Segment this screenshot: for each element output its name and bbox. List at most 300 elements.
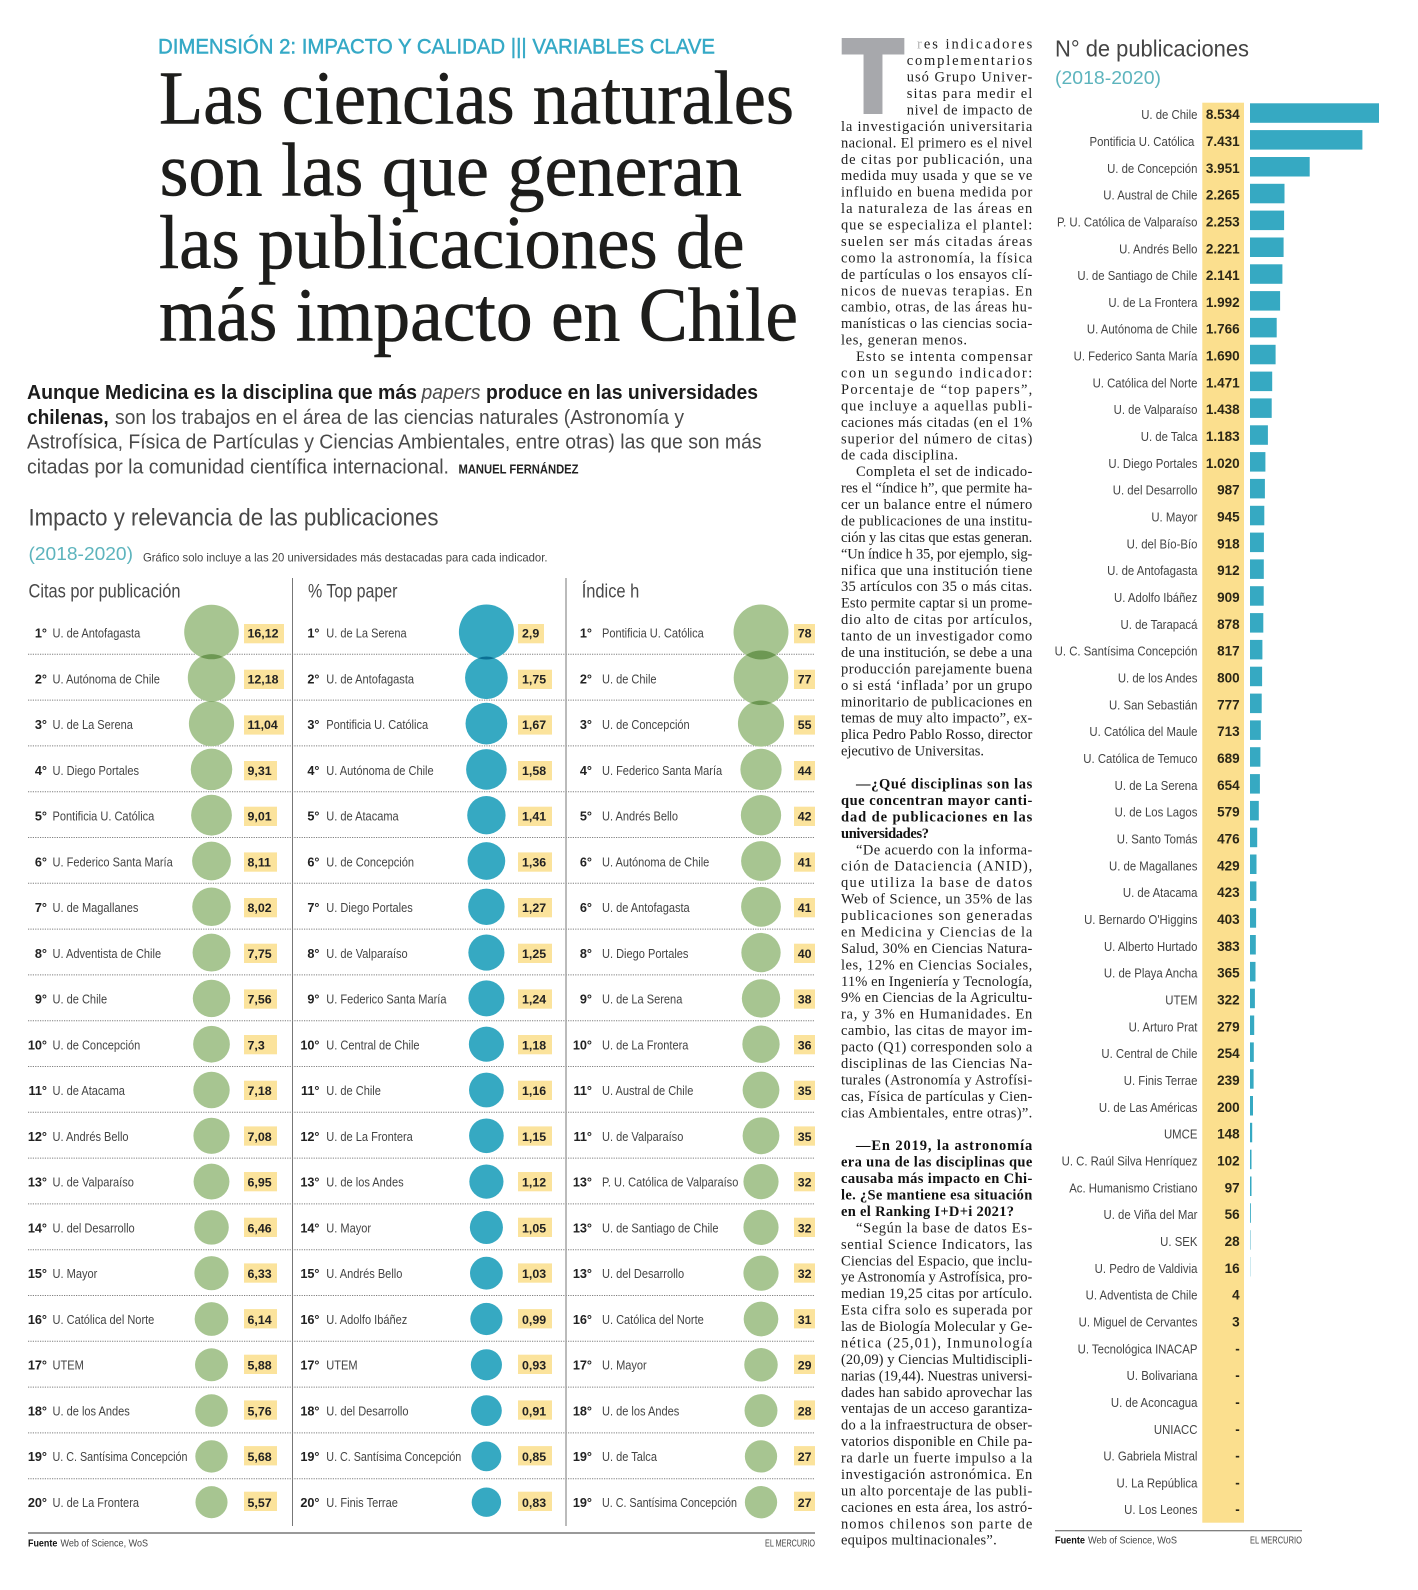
values: publicaciones: 1.766 — [1206, 322, 1240, 337]
university names: publicaciones: U. Bolivariana — [1127, 1368, 1198, 1383]
article text: tanto de un investigador como — [841, 628, 1032, 644]
ranks: citas — [28, 627, 47, 1510]
values: índice h: 32 — [798, 1221, 812, 1235]
university names: top paper: U. del Desarrollo — [326, 1403, 409, 1419]
values: publicaciones: - — [1235, 1422, 1240, 1437]
article text: complementarios — [907, 53, 1033, 69]
value highlight boxes: top paper — [518, 624, 552, 1511]
panel: % top paper — [300, 581, 552, 1517]
ranks: índice h: 13° — [573, 1221, 592, 1235]
values: top paper: 0,93 — [522, 1358, 546, 1372]
ranks: top paper: 12° — [300, 1130, 320, 1144]
university names: top paper: U. C. Santísima Concepción — [326, 1449, 461, 1464]
article text: temas de muy alto impacto”, ex- — [841, 711, 1032, 727]
values: índice h: 29 — [798, 1358, 812, 1372]
values: citas: 7,3 — [248, 1038, 265, 1052]
ranks: índice h: 5° — [580, 810, 592, 824]
values: índice h: 55 — [798, 718, 812, 732]
values: citas: 5,57 — [248, 1496, 272, 1510]
panel: citas por publicación — [28, 581, 284, 1518]
article text: sitas para medir el — [907, 86, 1032, 102]
article text: nicos de nuevas terapias. En — [841, 283, 1033, 299]
heading: n° de publicaciones: N° de publicaciones — [1055, 36, 1249, 62]
university names: publicaciones: U. Andrés Bello — [1119, 242, 1198, 256]
values: publicaciones: 1.471 — [1206, 375, 1240, 390]
university names: publicaciones: U. Los Leones — [1124, 1502, 1197, 1517]
article text: ción y las citas que estas generan. — [841, 530, 1032, 546]
ranks: citas: 2° — [35, 672, 47, 686]
university names: citas: U. Federico Santa María — [53, 855, 173, 870]
values: citas: 9,01 — [248, 810, 272, 824]
source note: left chart: Fuente — [28, 1538, 57, 1550]
university names: índice h: U. de Antofagasta — [602, 900, 690, 915]
values: publicaciones: 7.431 — [1206, 134, 1240, 149]
university names: publicaciones: UTEM — [1165, 993, 1197, 1008]
ranks: top paper: 14° — [300, 1221, 320, 1235]
values: top paper: 1,12 — [522, 1176, 546, 1190]
university names: publicaciones: U. Adolfo Ibáñez — [1114, 590, 1197, 605]
ranks: índice h: 8° — [580, 947, 592, 961]
article text: ejecutivo de Universitas. — [841, 744, 984, 760]
ranks: índice h: 2° — [580, 672, 592, 686]
university names: publicaciones: U. de Santiago de Chile — [1077, 268, 1198, 283]
university names: publicaciones: U. Católica del Norte — [1093, 376, 1198, 391]
ranks: citas: 19° — [28, 1450, 47, 1464]
article text: nivel de impacto de — [907, 102, 1032, 118]
university names: top paper: U. de La Serena — [326, 626, 407, 641]
values: índice h: 35 — [798, 1084, 812, 1098]
values: índice h: 40 — [798, 947, 812, 961]
article text: suelen ser más citadas áreas — [841, 234, 1033, 250]
article text: de una institución, se debe a una — [841, 645, 1033, 661]
ranks: índice h: 18° — [573, 1404, 592, 1418]
article text: universidades? — [841, 826, 929, 842]
proportional circles: citas — [184, 605, 239, 1518]
source note: left chart: Web of Science, WoS — [60, 1538, 148, 1550]
article text: le. ¿Se mantiene esa situación — [841, 1188, 1032, 1204]
values: citas: 5,68 — [248, 1450, 272, 1464]
university names: citas: U. Andrés Bello — [53, 1129, 129, 1144]
source note: right chart: Web of Science, WoS — [1088, 1534, 1177, 1546]
values: top paper: 1,27 — [522, 901, 546, 915]
values: top paper: 1,41 — [522, 810, 546, 824]
ranks: índice h: 1° — [580, 627, 592, 641]
university names: top paper: U. Finis Terrae — [326, 1495, 398, 1510]
values: publicaciones: - — [1235, 1341, 1240, 1356]
heading: % top paper: % Top paper — [308, 581, 398, 602]
values: publicaciones: 2.141 — [1206, 268, 1240, 283]
values: citas: 7,75 — [248, 947, 272, 961]
values: top paper: 1,25 — [522, 947, 546, 961]
article text: cambio, las citas de mayor im- — [841, 1023, 1032, 1039]
values: publicaciones: 912 — [1217, 563, 1240, 578]
article text: nética (25,01), Inmunología — [841, 1336, 1033, 1352]
values: índice h: 42 — [798, 810, 812, 824]
heading: índice h: Índice h — [582, 581, 639, 602]
values: citas: 8,02 — [248, 901, 272, 915]
values: índice h: 32 — [798, 1176, 812, 1190]
ranks: top paper — [300, 627, 320, 1510]
values: publicaciones: 148 — [1217, 1127, 1240, 1142]
ranks: índice h: 3° — [580, 718, 592, 732]
values: publicaciones: 817 — [1217, 644, 1240, 659]
article text: ción de Dataciencia (ANID), — [841, 859, 1032, 875]
ranks: top paper: 8° — [307, 947, 320, 961]
values: citas: 7,08 — [248, 1130, 272, 1144]
title: más impacto en Chile — [159, 273, 798, 357]
university names: publicaciones: U. de La Frontera — [1108, 295, 1198, 310]
title: las publicaciones de — [159, 201, 744, 285]
values: índice h: 77 — [798, 672, 812, 686]
ranks: índice h: 9° — [580, 993, 592, 1007]
university names: top paper: U. de Chile — [326, 1083, 381, 1098]
university names: publicaciones: U. Adventista de Chile — [1086, 1288, 1198, 1303]
values: citas: 7,18 — [248, 1084, 272, 1098]
title: son las que generan — [160, 129, 742, 213]
university names: publicaciones: U. Federico Santa María — [1074, 349, 1198, 364]
values: citas: 5,76 — [248, 1404, 272, 1418]
university names: citas: UTEM — [53, 1358, 84, 1373]
ranks: índice h: 11° — [574, 1130, 592, 1144]
deck text: son los trabajos en el área de las ciencias naturales (Astronomía y — [115, 407, 684, 429]
article text: nomos chilenos son parte de — [841, 1516, 1032, 1532]
values: publicaciones: 102 — [1217, 1153, 1240, 1168]
article text: como la astronomía, la física — [841, 250, 1033, 266]
university names: publicaciones: U. Central de Chile — [1101, 1046, 1198, 1061]
ranks: top paper: 15° — [300, 1267, 320, 1281]
values: top paper: 0,83 — [522, 1496, 546, 1510]
values: top paper: 1,16 — [522, 1084, 546, 1098]
university names: índice h: U. de Talca — [602, 1449, 657, 1464]
university names: top paper: U. de Atacama — [326, 809, 399, 824]
kicker: DIMENSIÓN 2: IMPACTO Y CALIDAD ||| VARIABLES CLAVE — [158, 33, 715, 58]
university names: índice h: U. de Santiago de Chile — [602, 1220, 719, 1236]
ranks: citas: 7° — [35, 901, 47, 915]
values: publicaciones: 2.265 — [1206, 188, 1240, 203]
values: top paper: 1,24 — [522, 993, 546, 1007]
ranks: top paper: 7° — [307, 901, 320, 915]
university names: índice h: U. de los Andes — [602, 1403, 679, 1419]
values: publicaciones: 4 — [1232, 1288, 1240, 1303]
source note: left chart — [28, 1538, 815, 1550]
ranks: top paper: 1° — [307, 627, 320, 641]
article text: dad de publicaciones en las — [841, 809, 1033, 825]
article text: que utiliza la base de datos — [841, 875, 1033, 891]
bar chart: publicaciones — [1250, 103, 1379, 1276]
value highlight boxes: índice h — [794, 624, 815, 1511]
values: índice h: 32 — [798, 1267, 812, 1281]
ranks: top paper: 6° — [307, 855, 320, 869]
values: índice h: 28 — [798, 1404, 812, 1418]
university names: publicaciones: UNIACC — [1154, 1422, 1198, 1437]
university names: top paper: U. Diego Portales — [326, 900, 413, 915]
article text: Web of Science, un 35% de las — [841, 892, 1033, 908]
article text: cias Ambientales, entre otras)”. — [841, 1105, 1032, 1121]
ranks: top paper: 13° — [300, 1176, 320, 1190]
article text: ye Astronomía y Astrofísica, pro- — [841, 1270, 1032, 1286]
ranks: top paper: 3° — [307, 718, 320, 732]
values: publicaciones: 878 — [1217, 617, 1240, 632]
years label: (2018-2020) — [28, 544, 133, 564]
ranks: top paper: 10° — [300, 1038, 320, 1052]
university names: citas: U. Mayor — [53, 1266, 97, 1281]
values: top paper — [522, 627, 546, 1510]
values: índice h: 27 — [798, 1450, 812, 1464]
values: top paper: 1,15 — [522, 1130, 546, 1144]
university names: citas: U. Adventista de Chile — [53, 946, 161, 961]
article text: las de Biología Molecular y Ge- — [841, 1319, 1032, 1335]
article text: res el “índice h”, que permite ha- — [841, 481, 1032, 497]
university names: índice h: U. C. Santísima Concepción — [602, 1495, 737, 1510]
article text: cer un balance entre el número — [841, 497, 1032, 513]
ranks: índice h: 19° — [573, 1496, 592, 1510]
university names: publicaciones: U. C. Santísima Concepción — [1055, 644, 1197, 659]
ranks: citas: 10° — [28, 1038, 47, 1052]
article text: Porcentaje de “top papers”, — [841, 382, 1032, 398]
values: publicaciones: 239 — [1217, 1073, 1240, 1088]
values: publicaciones: 254 — [1217, 1046, 1240, 1061]
source note: right chart — [1055, 1534, 1302, 1546]
values: publicaciones: 918 — [1217, 536, 1240, 551]
university names: citas: U. C. Santísima Concepción — [53, 1449, 188, 1464]
article text: de citas por publicación, una — [841, 152, 1033, 168]
ranks: citas: 20° — [28, 1496, 47, 1510]
university names: publicaciones: U. Pedro de Valdivia — [1095, 1261, 1198, 1276]
ranks: top paper: 2° — [307, 672, 320, 686]
article text: en el Ranking I+D+i 2021? — [841, 1204, 1014, 1220]
article text: manísticas o las ciencias socia- — [841, 316, 1032, 332]
ranks: citas: 16° — [28, 1313, 47, 1327]
article text: en Medicina y Ciencias de la — [841, 924, 1033, 940]
values: publicaciones: 16 — [1225, 1261, 1240, 1276]
values: citas: 12,18 — [248, 672, 279, 686]
deck text: Aunque Medicina es la disciplina que más — [27, 382, 417, 404]
values: publicaciones: 1.690 — [1206, 349, 1240, 364]
values: publicaciones — [1206, 107, 1240, 1517]
article text: que concentran mayor canti- — [841, 793, 1032, 809]
university names: publicaciones: Ac. Humanismo Cristiano — [1069, 1181, 1198, 1195]
university names: top paper — [326, 626, 461, 1510]
article text: “Un índice h 35, por ejemplo, sig- — [841, 546, 1032, 562]
deck text: citadas por la comunidad científica internacional. — [27, 456, 449, 478]
ranks: citas: 1° — [35, 627, 47, 641]
article text: cambio, otras, de las áreas hu- — [841, 300, 1032, 316]
article text: publicaciones son generadas — [841, 908, 1033, 924]
article text: Esto se intenta compensar — [856, 349, 1032, 365]
proportional circles: índice h — [734, 605, 788, 1518]
values: publicaciones: 8.534 — [1206, 107, 1240, 122]
article text: caciones más citadas (en el 1% — [841, 415, 1032, 431]
ranks: índice h: 13° — [573, 1176, 592, 1190]
source note: right chart: EL MERCURIO — [1250, 1534, 1302, 1546]
article text: nifica que una institución tiene — [841, 563, 1032, 579]
article text: minoritario de publicaciones en — [841, 694, 1033, 710]
article text: Ciencias del Espacio, que inclu- — [841, 1253, 1032, 1269]
article text: que incluye a aquellas publi- — [841, 398, 1032, 414]
deck text: papers — [421, 382, 480, 404]
university names: índice h: U. Austral de Chile — [602, 1083, 694, 1098]
university names: publicaciones: P. U. Católica de Valparaíso — [1057, 215, 1198, 230]
university names: índice h: U. de La Serena — [602, 992, 683, 1007]
panel: número de publicaciones — [1055, 36, 1379, 1523]
university names: top paper: Pontificia U. Católica — [326, 717, 428, 732]
university names: índice h: U. Autónoma de Chile — [602, 855, 710, 870]
ranks: índice h: 13° — [573, 1267, 592, 1281]
values: top paper: 0,99 — [522, 1313, 546, 1327]
university names: publicaciones: U. de La Serena — [1115, 778, 1198, 793]
university names: publicaciones: U. C. Raúl Silva Henríquez — [1062, 1154, 1197, 1169]
ranks: citas: 9° — [35, 993, 47, 1007]
article text: un alto porcentaje de las publi- — [841, 1483, 1032, 1499]
university names: índice h: U. Mayor — [602, 1358, 647, 1373]
university names: citas — [53, 626, 188, 1510]
article text: la investigación universitaria — [841, 119, 1033, 135]
article text: usó Grupo Univer- — [907, 70, 1032, 86]
article text: pacto (Q1) corresponden solo a — [841, 1040, 1033, 1056]
article text: ventajas de un acceso garantiza- — [841, 1401, 1032, 1417]
university names: publicaciones: U. de Las Américas — [1099, 1100, 1197, 1115]
article text: res indicadores — [917, 37, 1033, 53]
university names: citas: U. Diego Portales — [53, 763, 139, 778]
heading: citas por publicación: Citas por publicación — [28, 581, 180, 602]
university names: publicaciones: U. de Chile — [1141, 107, 1198, 122]
title — [159, 56, 798, 357]
university names: publicaciones: U. Mayor — [1151, 510, 1197, 525]
values: publicaciones: 777 — [1217, 697, 1240, 712]
values: citas — [248, 627, 279, 1510]
ranks: índice h: 4° — [580, 764, 592, 778]
university names: publicaciones: U. Bernardo O'Higgins — [1084, 912, 1197, 927]
article text: producción parejamente buena — [841, 661, 1033, 677]
ranks: citas: 12° — [28, 1130, 47, 1144]
deck text: chilenas, — [27, 407, 109, 429]
values: publicaciones: 28 — [1225, 1234, 1240, 1249]
university names: publicaciones: U. de Los Lagos — [1115, 805, 1197, 820]
values: publicaciones: 365 — [1217, 966, 1240, 981]
article text: Salud, 30% en Ciencias Natura- — [841, 941, 1032, 957]
university names: publicaciones: U. Santo Tomás — [1117, 832, 1197, 847]
university names: publicaciones: U. Gabriela Mistral — [1103, 1449, 1197, 1464]
article text — [841, 37, 1033, 1549]
values: citas: 5,88 — [248, 1358, 272, 1372]
values: publicaciones: - — [1235, 1395, 1240, 1410]
university names: publicaciones: U. Católica del Maule — [1089, 724, 1198, 739]
values: índice h: 31 — [798, 1313, 812, 1327]
values: publicaciones: 2.221 — [1206, 241, 1240, 256]
university names: publicaciones: U. Arturo Prat — [1129, 1020, 1198, 1034]
ranks: top paper: 18° — [300, 1404, 320, 1418]
values: publicaciones: 909 — [1217, 590, 1240, 605]
university names: publicaciones — [1055, 107, 1198, 1517]
values: top paper: 1,58 — [522, 764, 546, 778]
article text: que se especializa el plantel: — [841, 218, 1032, 234]
university names: citas: U. de La Frontera — [53, 1495, 139, 1510]
university names: publicaciones: U. Miguel de Cervantes — [1079, 1315, 1197, 1330]
values: citas: 6,33 — [248, 1267, 272, 1281]
deck text: Astrofísica, Física de Partículas y Ciencias Ambientales, entre otras) las que son más — [27, 431, 762, 453]
university names: publicaciones: U. Autónoma de Chile — [1087, 322, 1198, 337]
university names: publicaciones: U. de Atacama — [1123, 885, 1198, 900]
article text: la naturaleza de las áreas en — [841, 201, 1033, 217]
article text: o si está ‘inflada’ por un grupo — [841, 678, 1032, 694]
ranks: índice h: 17° — [573, 1358, 592, 1372]
values: índice h: 41 — [798, 855, 812, 869]
university names: publicaciones: Pontificia U. Católica — [1090, 134, 1195, 149]
article text: de cada disciplina. — [841, 448, 958, 464]
values: publicaciones: 1.992 — [1206, 295, 1240, 310]
values: citas: 7,56 — [248, 993, 272, 1007]
article text: sential Science Indicators, las — [841, 1237, 1033, 1253]
university names: top paper: U. Adolfo Ibáñez — [326, 1312, 407, 1327]
title: Las ciencias naturales — [159, 56, 794, 140]
values: citas: 6,95 — [248, 1176, 272, 1190]
values: publicaciones: 3.951 — [1206, 161, 1240, 176]
values: publicaciones: 383 — [1217, 939, 1240, 954]
university names: publicaciones: U. de los Andes — [1118, 671, 1197, 686]
values: publicaciones: 3 — [1232, 1314, 1240, 1329]
values: publicaciones: 322 — [1217, 992, 1240, 1007]
ranks: citas: 14° — [28, 1221, 47, 1235]
ranks: índice h: 10° — [573, 1038, 592, 1052]
article text: investigación astronómica. En — [841, 1467, 1033, 1483]
university names: índice h: P. U. Católica de Valparaíso — [602, 1175, 739, 1190]
values: índice h: 38 — [798, 993, 812, 1007]
values: publicaciones: 2.253 — [1206, 214, 1240, 229]
university names: publicaciones: UMCE — [1164, 1127, 1197, 1142]
ranks: citas: 15° — [28, 1267, 47, 1281]
years label: publicaciones: (2018-2020) — [1055, 68, 1161, 88]
values: publicaciones: 1.438 — [1206, 402, 1240, 417]
values: publicaciones: 579 — [1217, 805, 1240, 820]
article text: causaba más impacto en Chi- — [841, 1171, 1032, 1187]
values: citas: 16,12 — [248, 627, 279, 641]
panel: índice h — [573, 581, 815, 1518]
university names: citas: U. de Magallanes — [53, 900, 138, 915]
university names: índice h: U. del Desarrollo — [602, 1266, 684, 1281]
ranks: índice h: 6° — [580, 855, 592, 869]
article text: 11% en Ingeniería y Tecnología, — [841, 974, 1032, 990]
university names: publicaciones: U. de Valparaíso — [1114, 402, 1198, 417]
university names: índice h: U. Católica del Norte — [602, 1312, 704, 1327]
article text: Completa el set de indicado- — [856, 464, 1032, 480]
university names: publicaciones: U. de Playa Ancha — [1104, 966, 1198, 981]
article text: median 19,25 citas por artículo. — [841, 1286, 1032, 1302]
university names: top paper: U. de Concepción — [326, 855, 414, 870]
university names: top paper: U. Central de Chile — [326, 1038, 420, 1053]
values: índice h: 36 — [798, 1038, 812, 1052]
values: publicaciones: 945 — [1217, 510, 1240, 525]
university names: top paper: U. de La Frontera — [326, 1129, 413, 1144]
article text: —En 2019, la astronomía — [855, 1138, 1033, 1154]
values: top paper: 0,85 — [522, 1450, 546, 1464]
university names: citas: U. Católica del Norte — [53, 1312, 155, 1327]
values: índice h: 35 — [798, 1130, 812, 1144]
university names: citas: U. del Desarrollo — [53, 1220, 135, 1236]
values: publicaciones: 423 — [1217, 885, 1240, 900]
values: publicaciones: 476 — [1217, 831, 1240, 846]
values: top paper: 1,05 — [522, 1221, 546, 1235]
article text: 35 artículos con 35 o más citas. — [841, 579, 1032, 595]
article text: “Según la base de datos Es- — [856, 1220, 1032, 1236]
university names: publicaciones: U. Alberto Hurtado — [1104, 939, 1198, 954]
university names: citas: U. de Antofagasta — [53, 626, 141, 641]
ranks: top paper: 5° — [307, 810, 320, 824]
article text: plica Pedro Pablo Rosso, director — [841, 727, 1032, 743]
ranks: citas: 18° — [28, 1404, 47, 1418]
university names: publicaciones: U. La República — [1117, 1476, 1198, 1491]
article text: Esta cifra solo es superada por — [841, 1303, 1032, 1319]
ranks: citas: 6° — [35, 855, 47, 869]
